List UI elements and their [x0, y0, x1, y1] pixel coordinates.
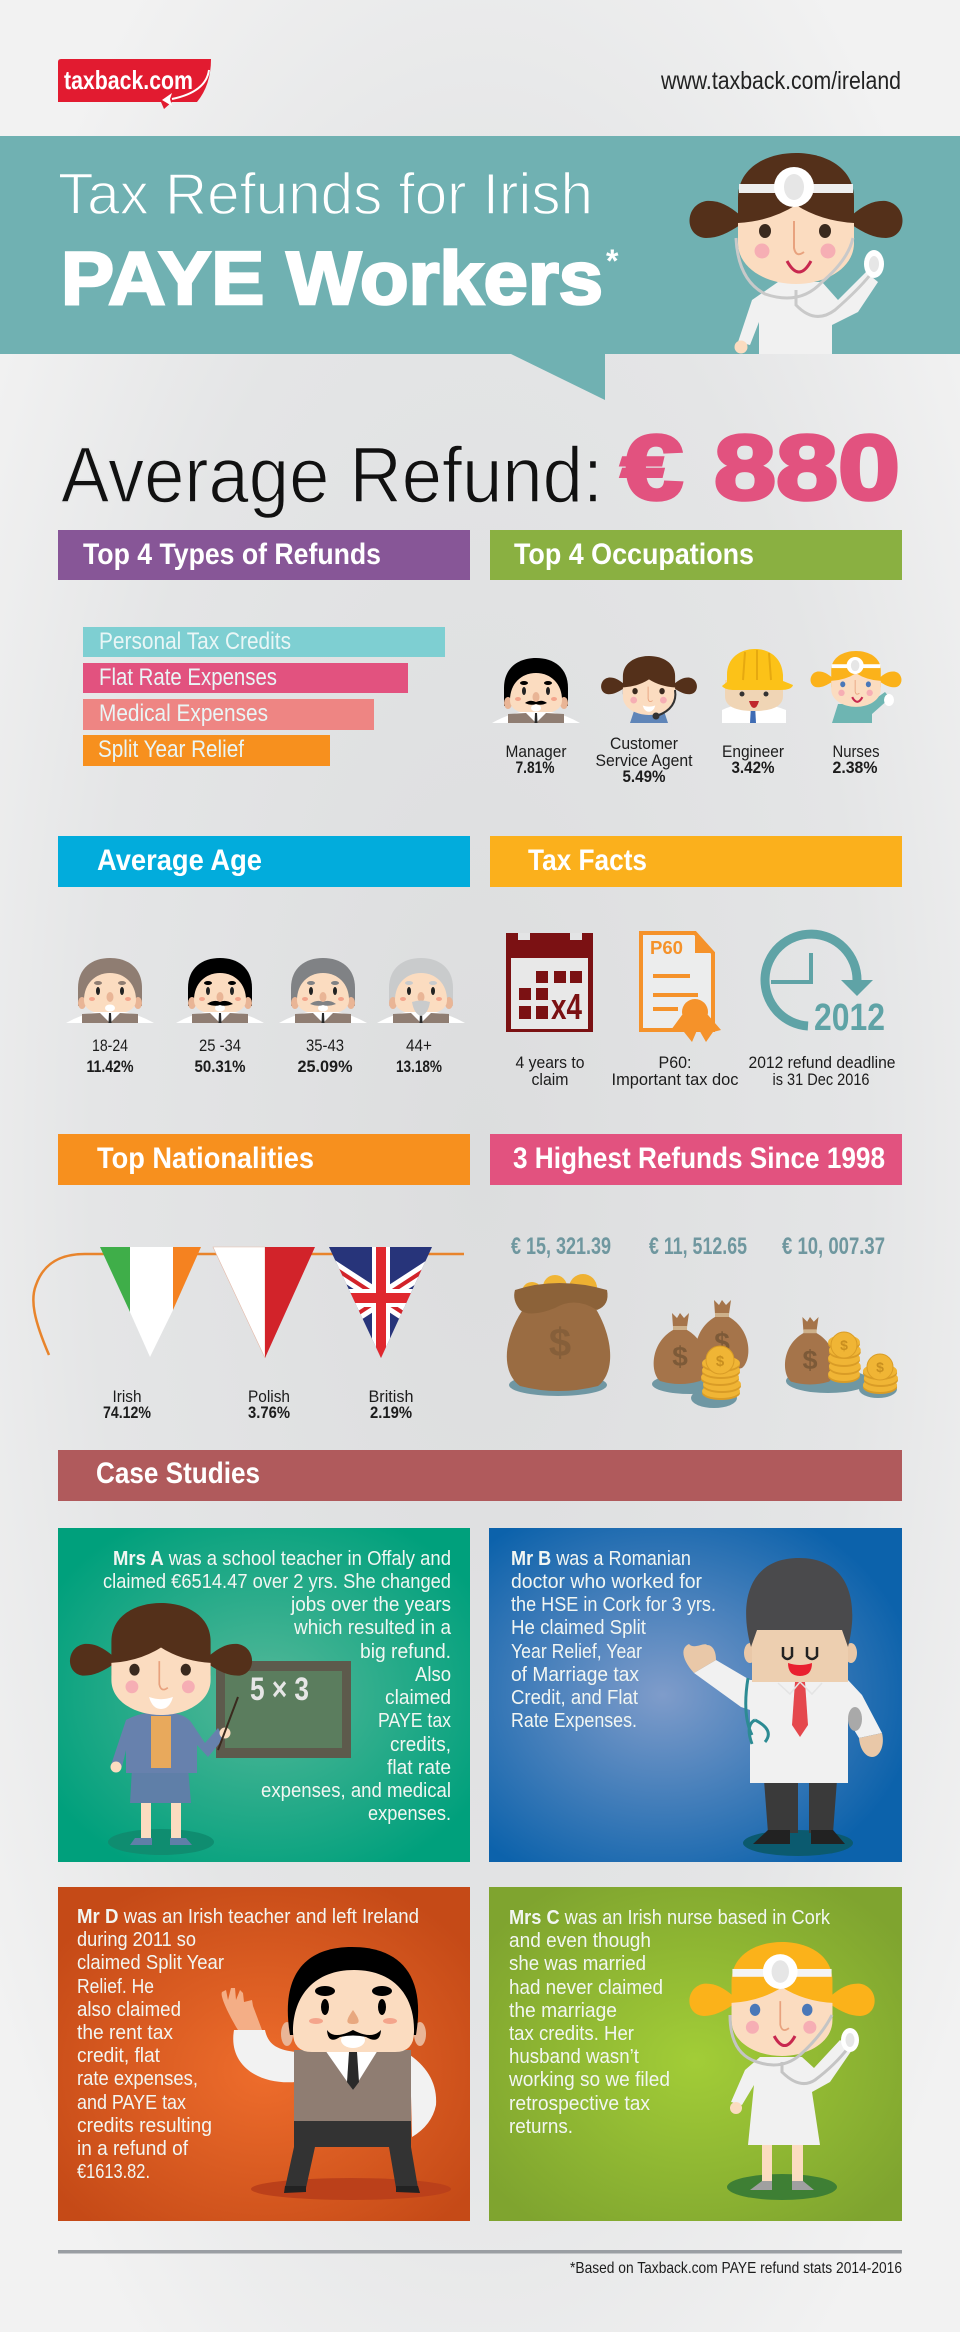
labels: ages: 50.31% — [194, 1057, 246, 1076]
panel: Mrs A case study — [58, 1528, 470, 1862]
labels: ages: 35-43 — [306, 1036, 344, 1055]
labels: tax facts: Important tax doc — [612, 1070, 739, 1089]
text: Mr D story: rate expenses, — [77, 2067, 198, 2090]
icon: two money bags with coins: $ — [672, 1341, 688, 1372]
text: Mr D story: and PAYE tax — [77, 2091, 187, 2114]
panel: top 4 types of refunds — [58, 530, 470, 766]
panel: 3 highest refunds — [490, 1134, 902, 1408]
text: Mrs A story: jobs over the years — [290, 1593, 451, 1616]
labels: ages: 18-24 — [92, 1036, 128, 1055]
panel: Mrs C case study — [489, 1887, 902, 2221]
labels: occupations: Customer — [610, 734, 678, 753]
refund amounts: € 10, 007.37 — [782, 1233, 885, 1260]
text: Mr B story: Rate Expenses. — [511, 1709, 637, 1732]
labels: ages: 11.42% — [86, 1057, 134, 1076]
labels: occupations: Nurses — [832, 742, 880, 761]
icon: customer service agent — [601, 656, 697, 723]
text: Mr B story: of Marriage tax — [511, 1663, 640, 1686]
text: Mrs C story — [508, 1906, 831, 2138]
labels: tax facts: 4 years to — [516, 1053, 584, 1072]
icon: age 35-43 — [279, 958, 367, 1023]
text: Mrs C story: and even though — [509, 1929, 651, 1952]
icon: two money bags with coins: $ — [716, 1353, 725, 1370]
heading: nationalities: Top Nationalities — [97, 1142, 314, 1175]
bar: medical expenses: Medical Expenses — [99, 700, 268, 727]
text: Mr D story: Mr D was an Irish teacher and left Ireland — [77, 1905, 419, 1928]
panel: average age — [58, 836, 470, 1076]
icon: P60 document: P60 — [650, 938, 683, 958]
text: Mr D story: credits resulting — [77, 2114, 212, 2137]
labels: ages: 13.18% — [396, 1057, 442, 1076]
text: Mr B story: the HSE in Cork for 3 yrs. — [511, 1593, 716, 1616]
text: Mr B story: He claimed Split — [511, 1616, 646, 1639]
footer rule — [58, 2250, 902, 2254]
website url: www.taxback.com/ireland — [660, 67, 901, 95]
heading: nationalities — [58, 1134, 470, 1185]
text: Mrs C story: husband wasn’t — [509, 2045, 639, 2068]
heading: case studies: Case Studies — [96, 1457, 260, 1490]
icon: age 25-34 — [176, 958, 264, 1023]
text: Mrs A story: claimed €6514.47 over 2 yrs. She changed — [103, 1570, 451, 1593]
icon: age 18-24 — [66, 958, 154, 1023]
flag: Polish — [213, 1247, 315, 1358]
bunting string — [33, 1254, 464, 1355]
icon: two money bags with coins: $ — [714, 1327, 730, 1358]
text: Mrs A story: flat rate — [387, 1756, 451, 1779]
heading: average refund: Average Refund: — [61, 430, 603, 519]
bar: medical expenses — [83, 699, 374, 730]
logo: taxback.com: taxback.com — [64, 65, 193, 95]
panel: top nationalities — [33, 1134, 470, 1422]
labels: ages: 25.09% — [298, 1057, 352, 1076]
heading: occupations — [490, 530, 902, 580]
text: Mrs A story: credits, — [390, 1733, 451, 1756]
panel: tax facts — [490, 836, 902, 1089]
heading: case studies — [58, 1450, 902, 1501]
illustration: teacher and blackboard: 5 × 3 — [250, 1671, 309, 1707]
refund amounts: € 15, 321.39 — [511, 1233, 611, 1260]
icon: nurse — [811, 651, 901, 723]
heading: types of refunds — [58, 530, 470, 580]
title — [58, 162, 619, 320]
labels: tax facts — [516, 1053, 896, 1089]
labels: occupations: 3.42% — [732, 758, 774, 777]
heading: highest refunds: 3 Highest Refunds Since 1998 — [513, 1142, 885, 1175]
heading: highest refunds — [490, 1134, 902, 1185]
text: Mr B story: Credit, and Flat — [511, 1686, 638, 1709]
labels: tax facts: 2012 refund deadline — [748, 1053, 896, 1072]
text: Mr D story: €1613.82. — [77, 2160, 150, 2183]
heading: average refund — [61, 417, 900, 519]
refund amounts: € 11, 512.65 — [649, 1233, 747, 1260]
labels: tax facts: P60: — [658, 1053, 692, 1072]
text: Mr B story: doctor who worked for — [511, 1570, 702, 1593]
text: Mrs C story: retrospective tax — [509, 2092, 651, 2115]
labels: nationalities: 3.76% — [248, 1403, 290, 1422]
labels: nationalities: Irish — [112, 1387, 142, 1406]
icon: money bag with coin stacks: $ — [876, 1359, 884, 1375]
labels: nationalities: 74.12% — [103, 1403, 151, 1422]
text: Mr D story: Relief. He — [77, 1975, 154, 1998]
icon: P60 document — [641, 933, 721, 1042]
text: Mrs A story: expenses, and medical — [261, 1779, 451, 1802]
icon: calendar — [506, 933, 593, 1032]
bar: split year relief: Split Year Relief — [98, 736, 244, 763]
heading: occupations: Top 4 Occupations — [514, 538, 754, 571]
illustration: man with moustache waving — [222, 1947, 451, 2200]
text: Mrs C story: tax credits. Her — [509, 2022, 634, 2045]
banner with speech tail — [0, 136, 960, 400]
text: Mrs C story: returns. — [509, 2115, 573, 2138]
labels: occupations: 7.81% — [516, 758, 554, 777]
heading: average age: Average Age — [97, 844, 262, 877]
icon: money bag with coin stacks — [785, 1317, 898, 1398]
icon: calendar: x4 — [551, 986, 582, 1027]
labels: occupations: Manager — [506, 742, 567, 761]
text: Mrs C story: had never claimed — [509, 1976, 663, 1999]
labels: nationalities: 2.19% — [370, 1403, 412, 1422]
text: Mr D story: during 2011 so — [77, 1928, 196, 1951]
bar: split year relief — [83, 735, 330, 766]
panel: Mr B case study — [489, 1528, 902, 1862]
text: Mr B story: Year Relief, Year — [511, 1640, 642, 1663]
icon: large money bag — [507, 1274, 610, 1396]
icon: engineer — [722, 649, 793, 723]
heading: average age — [58, 836, 470, 887]
title: Tax Refunds for Irish — [58, 162, 593, 227]
flag: Irish — [100, 1247, 201, 1357]
labels: occupations: Service Agent — [596, 751, 693, 770]
text: Mrs A story: Mrs A was a school teacher in Offaly and — [113, 1547, 451, 1570]
labels: occupations: 5.49% — [622, 767, 666, 786]
icon: two money bags with coins — [652, 1300, 748, 1408]
flag: British — [325, 1247, 437, 1358]
text: Mr D story: in a refund of — [77, 2137, 188, 2160]
refund amounts — [511, 1233, 885, 1260]
text: Mr B story — [511, 1547, 716, 1732]
illustration: teacher and blackboard — [70, 1603, 351, 1855]
heading: types of refunds: Top 4 Types of Refunds — [83, 538, 381, 571]
icon: money bag with coin stacks: $ — [802, 1345, 818, 1375]
illustration: doctor girl in banner — [690, 153, 902, 354]
title: * — [606, 243, 619, 279]
bar: personal tax credits: Personal Tax Credits — [99, 628, 291, 655]
text: Mr D story: also claimed — [77, 1998, 181, 2021]
logo: taxback.com — [58, 59, 211, 109]
text: Mrs C story: working so we filed — [508, 2068, 670, 2091]
heading: tax facts — [490, 836, 902, 887]
labels: ages — [86, 1036, 442, 1076]
text: Mr D story: claimed Split Year — [77, 1951, 224, 1974]
text: Mrs A story: big refund. — [360, 1640, 451, 1663]
text: Mrs A story: PAYE tax — [378, 1709, 452, 1732]
labels: nationalities: British — [368, 1387, 414, 1406]
text: Mr D story: the rent tax — [77, 2021, 174, 2044]
labels: ages: 44+ — [406, 1036, 432, 1055]
text: Mrs A story: claimed — [385, 1686, 451, 1709]
text: Mrs A story: Also — [415, 1663, 451, 1686]
icon: large money bag: $ — [549, 1321, 571, 1365]
illustration: doctor man — [683, 1558, 883, 1856]
text: Mrs A story — [103, 1547, 452, 1825]
labels: ages: 25 -34 — [199, 1036, 241, 1055]
bar: personal tax credits — [83, 627, 445, 657]
illustration: nurse with stethoscope — [689, 1942, 875, 2200]
icon: age 44+ — [377, 958, 465, 1023]
panel: Mr D case study — [58, 1887, 470, 2221]
heading: average refund: € 880 — [621, 417, 900, 519]
text: Mr D story: credit, flat — [77, 2044, 160, 2067]
labels: nationalities — [103, 1387, 414, 1422]
title: PAYE Workers — [61, 236, 603, 320]
text: Mrs C story: the marriage — [509, 1999, 617, 2022]
text: Mrs C story: Mrs C was an Irish nurse based in Cork — [509, 1906, 831, 1929]
panel: top 4 occupations — [490, 530, 902, 786]
bar: flat rate expenses — [83, 663, 408, 693]
labels: occupations: 2.38% — [832, 758, 878, 777]
labels: nationalities: Polish — [248, 1387, 290, 1406]
bar: flat rate expenses: Flat Rate Expenses — [99, 664, 277, 691]
text: Mr B story: Mr B was a Romanian — [511, 1547, 691, 1570]
labels: tax facts: is 31 Dec 2016 — [772, 1070, 870, 1089]
labels: tax facts: claim — [532, 1070, 568, 1089]
labels: occupations — [506, 734, 880, 786]
footnote: *Based on Taxback.com PAYE refund stats 2014-2016 — [570, 2260, 902, 2277]
icon: money bag with coin stacks: $ — [840, 1337, 848, 1353]
text: Mr D story — [77, 1905, 419, 2183]
heading: tax facts: Tax Facts — [528, 844, 647, 877]
icon: 2012 clock: 2012 — [814, 997, 885, 1039]
text: Mrs C story: she was married — [509, 1952, 646, 1975]
text: Mrs A story: expenses. — [368, 1802, 451, 1825]
icon: manager — [492, 658, 580, 723]
icon: 2012 clock — [765, 934, 885, 1039]
labels: occupations: Engineer — [722, 742, 784, 761]
text: Mrs A story: which resulted in a — [293, 1616, 452, 1639]
